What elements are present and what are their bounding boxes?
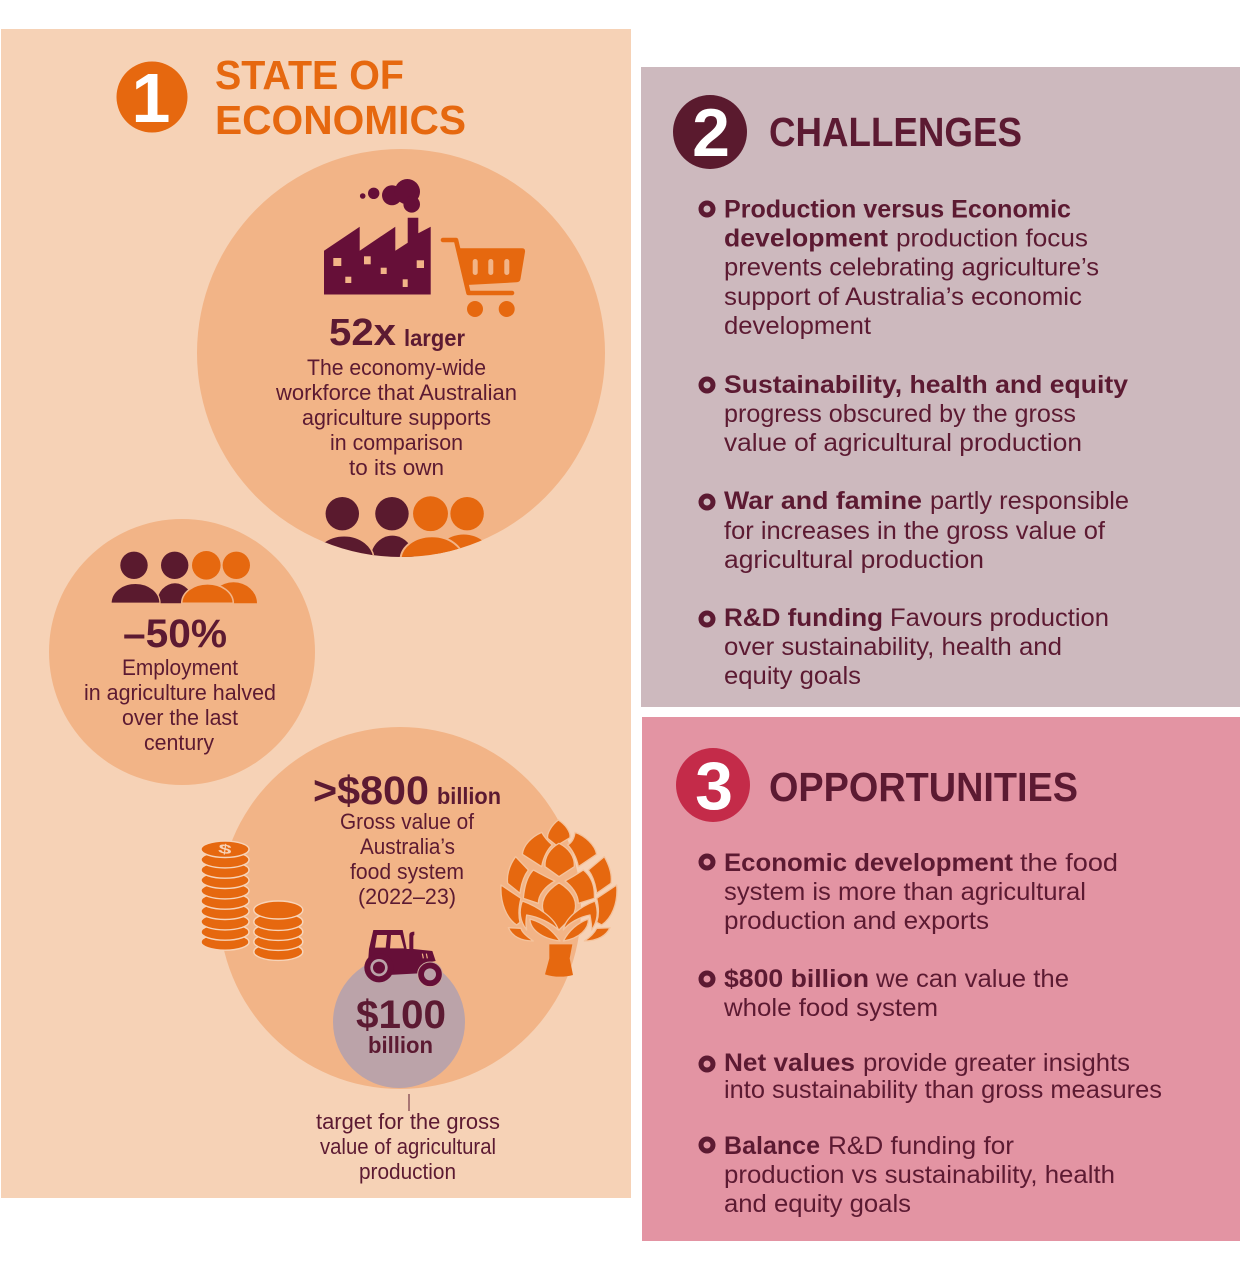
- item: net values: Net values: [724, 1049, 855, 1077]
- item: balance R&D funding: [701, 1132, 1115, 1218]
- text: target description: production: [359, 1159, 456, 1184]
- item: production versus economic development: prevents celebrating agriculture’s: [724, 254, 1099, 282]
- text: workforce description: [275, 355, 517, 480]
- panel: state of economics: [1, 29, 631, 1198]
- item: economic development: system is more than agricultural: [724, 878, 1086, 906]
- stat: >$800 billion: >$800: [313, 769, 429, 813]
- text: target description: value of agricultural: [320, 1134, 496, 1159]
- text: target description: target for the gross: [316, 1109, 500, 1134]
- stat: $100 billion: $100: [356, 993, 446, 1037]
- icon: artichoke: [501, 820, 617, 977]
- stat: $100 billion: billion: [368, 1032, 433, 1058]
- text: gross value description: [340, 809, 475, 909]
- icon: shopping cart: [443, 240, 525, 317]
- icon: factory with smoke: [324, 179, 431, 294]
- text: employment description: [84, 655, 276, 755]
- text: workforce description: to its own: [349, 455, 444, 480]
- circle: $100 billion target: [333, 956, 465, 1088]
- badge: number 2: 2: [692, 95, 730, 171]
- text: workforce description: in comparison: [330, 430, 463, 455]
- item: $800 billion: $800 billion: [724, 965, 869, 993]
- badge: number 3: [676, 748, 750, 824]
- text: employment description: Employment: [122, 655, 238, 680]
- stat: 52x larger: larger: [404, 325, 465, 351]
- item: $800 billion: whole food system: [723, 994, 938, 1022]
- icon: coin stacks: $: [217, 841, 233, 858]
- item: R&D funding: equity goals: [724, 662, 861, 690]
- stat: 52x larger: [329, 312, 465, 354]
- stat: >$800 billion: billion: [437, 783, 501, 809]
- text: gross value description: Australia’s: [360, 834, 455, 859]
- item: economic development: the food: [1020, 849, 1118, 877]
- icon: coin stacks: [201, 841, 303, 960]
- item: $800 billion: [701, 965, 1069, 1022]
- item: production versus economic development: [701, 196, 1099, 340]
- text: gross value description: food system: [350, 859, 464, 884]
- text: target description: [316, 1109, 500, 1184]
- heading: state of economics: ECONOMICS: [215, 97, 466, 143]
- icon: people group, clipped by circle: [324, 496, 484, 557]
- text: gross value description: (2022–23): [358, 884, 456, 909]
- stat: >$800 billion: [313, 769, 501, 813]
- text: workforce description: agriculture supports: [302, 405, 491, 430]
- heading: state of economics: STATE OF: [215, 52, 404, 98]
- heading: challenges: CHALLENGES: [769, 109, 1022, 155]
- badge: number 3: 3: [695, 748, 733, 824]
- circle: employment -50%: [49, 519, 315, 785]
- panel: challenges: [641, 67, 1240, 707]
- stat: 52x larger: 52x: [329, 312, 396, 354]
- item: war and famine: [701, 487, 1129, 574]
- item: sustainability, health and equity: [701, 371, 1128, 457]
- item: net values: into sustainability than gross measures: [724, 1076, 1162, 1104]
- item: R&D funding: [701, 604, 1109, 690]
- icon: people group: [111, 551, 257, 603]
- item: sustainability, health and equity: value of agricultural production: [724, 429, 1082, 457]
- badge: number 2: [673, 95, 747, 171]
- item: war and famine: partly responsible: [930, 487, 1129, 515]
- heading: state of economics: [215, 52, 466, 143]
- item: production versus economic development: development: [724, 312, 871, 340]
- heading: opportunities: OPPORTUNITIES: [769, 764, 1078, 810]
- text: employment description: century: [144, 730, 214, 755]
- panel: opportunities: [642, 717, 1240, 1241]
- item: balance R&D funding: Balance: [724, 1132, 820, 1160]
- item: sustainability, health and equity: progress obscured by the gross: [724, 400, 1076, 428]
- item: production versus economic development: production focus: [896, 224, 1088, 252]
- badge: number 1: [116, 59, 188, 137]
- item: R&D funding: R&D funding: [724, 604, 883, 632]
- item: R&D funding: over sustainability, health and: [724, 633, 1062, 661]
- text: gross value description: Gross value of: [340, 809, 475, 834]
- item: production versus economic development: development: [724, 224, 889, 252]
- icon: tractor: [364, 930, 442, 987]
- item: production versus economic development: Production versus Economic: [724, 196, 1071, 224]
- item: war and famine: for increases in the gross value of: [724, 517, 1105, 545]
- item: $800 billion: we can value the: [875, 965, 1069, 993]
- item: balance R&D funding: production vs sustainability, health: [724, 1161, 1115, 1189]
- item: economic development: Economic development: [724, 849, 1014, 877]
- text: workforce description: The economy-wide: [307, 355, 486, 380]
- item: balance R&D funding: and equity goals: [724, 1190, 911, 1218]
- item: net values: [701, 1049, 1162, 1104]
- circle: workforce 52x: [197, 149, 605, 560]
- text: employment description: in agriculture halved: [84, 680, 276, 705]
- circle: food system value: [201, 727, 617, 1089]
- item: net values: provide greater insights: [863, 1049, 1130, 1077]
- item: R&D funding: Favours production: [890, 604, 1109, 632]
- item: war and famine: War and famine: [724, 487, 922, 515]
- badge: number 1: 1: [132, 59, 170, 137]
- text: employment description: over the last: [122, 705, 238, 730]
- item: war and famine: agricultural production: [724, 546, 984, 574]
- stat: $100 billion: [356, 993, 446, 1058]
- stat: -50%: –50%: [123, 612, 227, 656]
- item: economic development: production and exports: [724, 907, 989, 935]
- item: sustainability, health and equity: Sustainability, health and equity: [724, 371, 1128, 399]
- leader line: [408, 1094, 410, 1111]
- item: production versus economic development: support of Australia’s economic: [724, 283, 1082, 311]
- item: balance R&D funding: R&D funding for: [828, 1132, 1014, 1160]
- item: economic development: [701, 849, 1118, 935]
- text: workforce description: workforce that Australian: [275, 380, 517, 405]
